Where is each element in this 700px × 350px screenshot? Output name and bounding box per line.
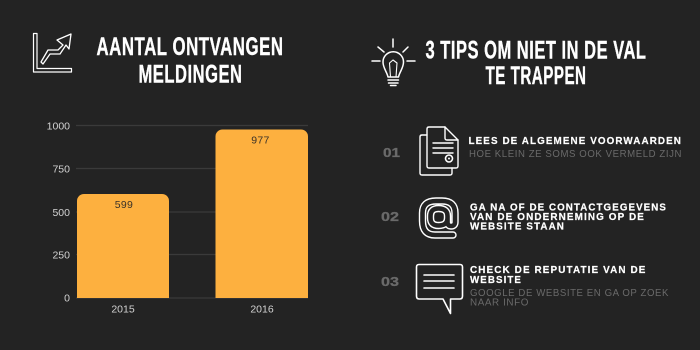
heading: 3 tips: [426, 36, 646, 90]
panel: meldingen: [34, 33, 308, 316]
tip text: LEES DE ALGEMENE VOORWAARDEN: [468, 136, 682, 147]
tip text: [468, 136, 682, 160]
y axis labels: 1000: [47, 120, 70, 132]
tip text: WEBSITE: [470, 275, 522, 286]
y axis labels: 500: [52, 207, 70, 219]
bar: 2015: 2015: [111, 304, 135, 316]
icon: documents: [420, 127, 458, 175]
tip text: NAAR INFO: [470, 298, 529, 308]
tip 1: [383, 127, 682, 175]
bar: 2016: [216, 130, 308, 316]
icon: at sign: [422, 201, 455, 235]
bar: 2015: [77, 194, 169, 316]
tip text: CHECK DE REPUTATIE VAN DE: [470, 265, 646, 276]
bar chart: [47, 120, 308, 316]
icon: rising chart: [34, 34, 72, 72]
tip text: WEBSITE STAAN: [470, 222, 565, 232]
heading: aantal ontvangen meldingen: [96, 33, 284, 88]
number 02: 02: [381, 209, 399, 224]
heading: aantal ontvangen meldingen: AANTAL ONTVANGEN: [96, 33, 284, 61]
panel: tips: [372, 36, 682, 314]
bar: 2015: 599: [115, 199, 133, 211]
y axis labels: 250: [52, 250, 70, 262]
icon: speech bubble: [416, 264, 462, 314]
y axis labels: 750: [52, 164, 70, 176]
y axis labels: [47, 120, 70, 304]
tip 3: [381, 264, 669, 314]
tip text: [470, 265, 669, 308]
tip text: VAN DE ONDERNEMING OP DE: [470, 212, 645, 223]
tip text: [470, 202, 667, 232]
tip text: HOE KLEIN ZE SOMS OOK VERMELD ZIJN: [469, 149, 682, 160]
tip 2: [381, 201, 667, 235]
heading: aantal ontvangen meldingen: MELDINGEN: [138, 60, 242, 88]
icon: light bulb: [372, 39, 415, 86]
number 03: 03: [381, 274, 399, 289]
bar: 2016: 2016: [250, 304, 274, 316]
number 01: 01: [383, 145, 400, 160]
y axis labels: 0: [64, 292, 70, 304]
tip text: GOOGLE DE WEBSITE EN GA OP ZOEK: [470, 288, 669, 299]
heading: 3 tips: TE TRAPPEN: [486, 62, 586, 90]
tip text: GA NA OF DE CONTACTGEGEVENS: [470, 202, 667, 214]
bar: 2016: 977: [251, 134, 270, 146]
